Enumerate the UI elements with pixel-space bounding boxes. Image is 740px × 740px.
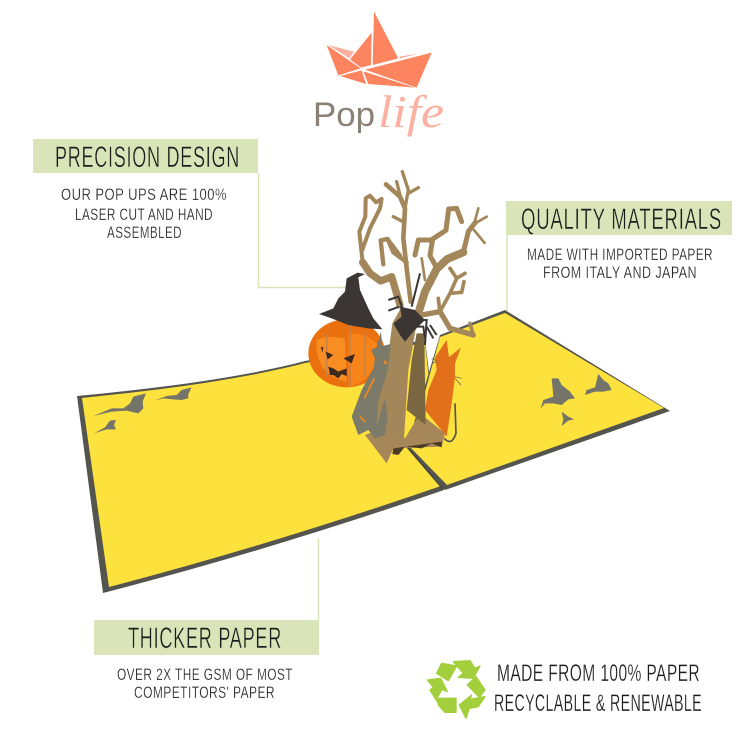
- card left panel: [77, 340, 444, 593]
- callout connector: quality materials: [506, 235, 508, 311]
- icon: paper boat: [327, 12, 432, 88]
- icon: recycle symbol: [427, 661, 485, 718]
- logo: Poplife: [313, 12, 444, 137]
- callout connector: thicker paper: [318, 538, 320, 620]
- heading bar: [506, 201, 732, 235]
- bats: right panel: [541, 374, 612, 426]
- panel: thicker paper: [94, 620, 319, 702]
- pop-up card: [77, 172, 670, 593]
- callout connector: precision design: [258, 173, 346, 288]
- bats: left panel: [93, 387, 192, 433]
- tree branches: [359, 172, 487, 335]
- heading bar: [94, 620, 319, 655]
- grey cat: [352, 332, 391, 438]
- card right panel: [407, 310, 670, 490]
- logo word: Pop: Pop: [313, 96, 375, 134]
- spider: [388, 273, 437, 345]
- heading: THICKER PAPER: [128, 622, 282, 655]
- tree front trunk: [368, 307, 418, 438]
- panel: quality materials: [506, 201, 732, 282]
- logo word: life: life: [378, 86, 444, 137]
- body line 2: COMPETITORS' PAPER: [134, 683, 275, 702]
- heading bar: [33, 139, 258, 173]
- base platform: [365, 413, 445, 463]
- witch hat: [319, 273, 382, 329]
- pumpkin: [308, 319, 385, 387]
- body line 2: LASER CUT AND HAND: [75, 205, 213, 224]
- hat, trunk, spider, cats: [319, 273, 462, 463]
- panel: precision design: [33, 139, 258, 242]
- body line 1: OVER 2X THE GSM OF MOST: [117, 665, 293, 684]
- panel: recyclable: [427, 660, 702, 718]
- heading: PRECISION DESIGN: [55, 141, 240, 174]
- body line 3: ASSEMBLED: [107, 223, 182, 242]
- body line 1: OUR POP UPS ARE 100%: [61, 185, 227, 204]
- orange cat: [425, 340, 462, 442]
- tree back trunk: [407, 333, 426, 425]
